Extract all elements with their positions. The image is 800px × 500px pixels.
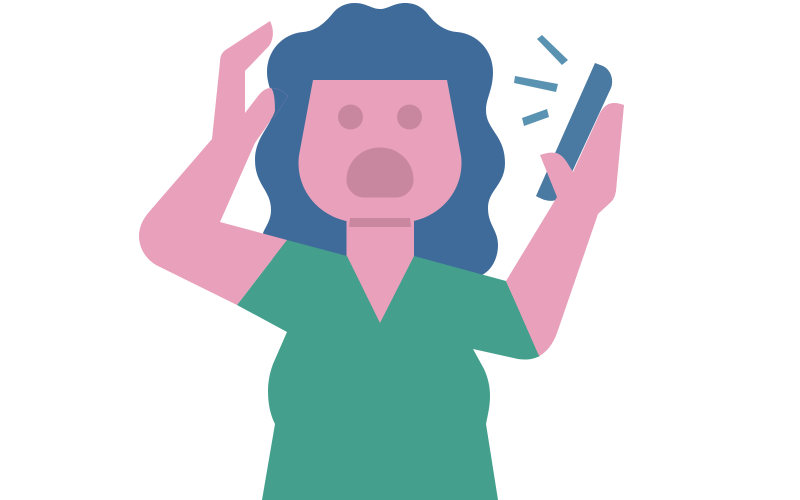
face (298, 80, 462, 222)
phone (536, 63, 612, 201)
left eye (338, 104, 363, 130)
right eye (397, 104, 422, 130)
neck shadow (349, 218, 411, 227)
raised arm: right holding phone (506, 103, 624, 356)
raised arm: left (139, 21, 288, 305)
alert line: middle (514, 76, 558, 92)
alert line: top (537, 35, 568, 65)
finger outline (271, 88, 288, 118)
hair (255, 3, 505, 300)
alert line: bottom (522, 109, 549, 126)
shirt (237, 240, 540, 500)
open mouth (346, 148, 414, 198)
neck (346, 205, 414, 330)
